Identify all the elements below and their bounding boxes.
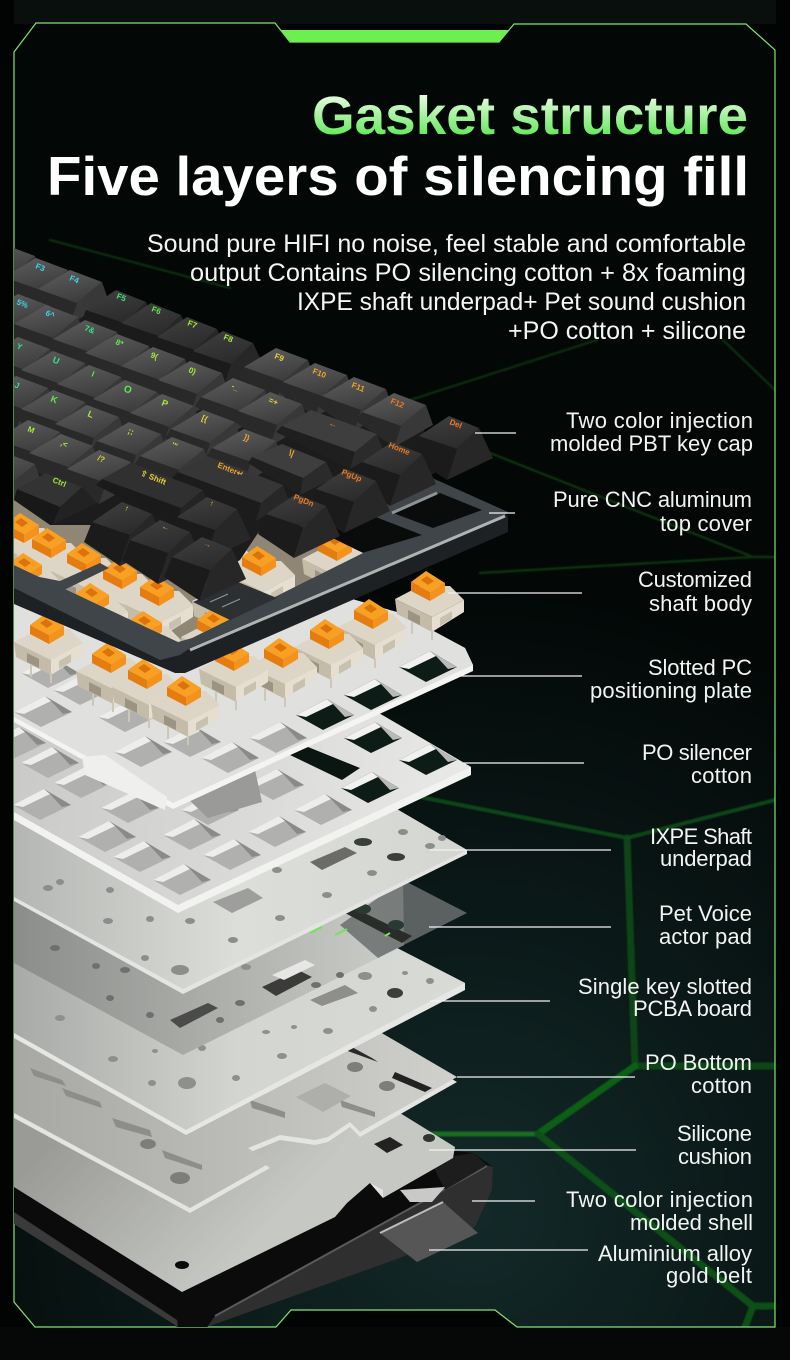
knob pad	[193, 582, 277, 620]
key legends: Home	[387, 441, 412, 457]
key: backslash	[248, 444, 334, 495]
key legends: =+	[267, 396, 280, 407]
key legends: I	[90, 370, 96, 379]
key legends: ↑	[208, 499, 215, 508]
key legends: ]}	[242, 433, 251, 443]
switches inside cover	[14, 513, 363, 642]
top background strip	[14, 0, 776, 24]
key legends: F5	[115, 292, 128, 304]
key legends: [{	[200, 414, 209, 424]
layer: silicone cushion	[14, 1114, 455, 1292]
callout: shaft body	[448, 567, 752, 616]
key legends: /?	[96, 454, 106, 465]
background green hexagon lines	[50, 240, 775, 1327]
key: shift	[96, 464, 204, 508]
callout: silicone: Silicone	[677, 1121, 752, 1146]
green top bar	[280, 30, 509, 42]
key legends: ⇧ Shift	[139, 469, 168, 487]
key legends: Del	[448, 418, 463, 431]
intro paragraph: output Contains PO silencing cotton + 8x foaming	[190, 259, 746, 287]
key legends: Ctrl	[51, 476, 67, 489]
intro paragraph: +PO cotton + silicone	[508, 317, 746, 345]
callout: silicone: cushion	[678, 1144, 752, 1169]
callout: shaft body: shaft body	[649, 591, 752, 616]
switch bay inside cover	[14, 500, 363, 642]
key: backspace	[276, 410, 383, 469]
exploded keyboard illustration	[0, 244, 508, 1327]
key legends: 7&	[83, 324, 96, 336]
intro paragraph: Sound pure HIFI no noise, feel stable and comfortable	[147, 230, 746, 258]
key legends: '"	[170, 441, 179, 451]
key legends: J	[13, 381, 21, 391]
key legends: O	[122, 384, 133, 397]
layer: PO bottom cotton	[14, 1033, 457, 1213]
title line 2: Five layers of silencing fill	[47, 145, 749, 207]
callout: key cap: Two color injection	[566, 408, 753, 433]
callout: PO silencer: PO silencer	[642, 740, 752, 765]
callout: PC plate: Slotted PC	[648, 655, 752, 680]
layer: pet voice actor pad	[14, 883, 467, 1055]
key legends: ,<	[59, 439, 69, 450]
callout: silicone	[429, 1121, 752, 1169]
callout: PO silencer: cotton	[691, 763, 752, 788]
belt highlight	[380, 1202, 443, 1233]
key legends: F12	[389, 397, 406, 410]
layer: single key slotted PCBA board	[14, 948, 465, 1135]
callout: PO bottom	[457, 1050, 752, 1098]
callout: PCBA: Single key slotted	[578, 974, 752, 999]
callout: shell: Two color injection	[566, 1187, 753, 1212]
key legends: PgDn	[292, 493, 315, 509]
key legends: -_	[230, 382, 241, 393]
callout: PO bottom: PO Bottom	[645, 1050, 752, 1075]
key legends: K	[49, 394, 59, 405]
callout: IXPE: underpad	[660, 846, 752, 871]
callout: key cap: molded PBT key cap	[550, 431, 753, 456]
intro paragraph: IXPE shaft underpad+ Pet sound cushion	[297, 288, 746, 316]
callout: shell	[472, 1187, 753, 1235]
callout: PCBA: PCBA board	[633, 996, 752, 1021]
key legends: F4	[68, 274, 81, 286]
key legends: 8*	[114, 338, 125, 349]
layer: slotted PC positioning plate	[14, 600, 473, 810]
cross bar	[38, 563, 109, 590]
tab on plate	[82, 755, 167, 810]
callout: top cover	[489, 487, 752, 536]
key legends: M	[26, 425, 36, 435]
callout: top cover: top cover	[660, 511, 752, 536]
key legends: F3	[34, 262, 47, 274]
callout: PC plate: positioning plate	[590, 678, 752, 703]
callout: PO silencer	[463, 740, 752, 788]
callout: shaft body: Customized	[638, 567, 752, 592]
key legends: PgUp	[340, 468, 363, 484]
key legends: ;:	[126, 426, 136, 437]
key block underlay	[14, 316, 436, 580]
key legends: U	[51, 355, 61, 366]
key legends: 0)	[187, 366, 198, 377]
key legends: ←	[160, 522, 171, 533]
layer: aluminium alloy gold belt	[380, 1202, 478, 1262]
key legends: F11	[350, 381, 367, 394]
key legends: 5%	[15, 298, 29, 310]
callout: PC plate	[456, 655, 752, 703]
callout: shell: molded shell	[630, 1210, 753, 1235]
layer: two color injection shell	[14, 1151, 493, 1327]
callout: belt: Aluminium alloy	[598, 1241, 752, 1266]
layer: PO silencer cotton	[14, 714, 471, 913]
callout: key cap	[475, 408, 753, 456]
key legends: F10	[311, 367, 328, 380]
key legends: 9(	[149, 351, 160, 362]
key legends: F8	[222, 333, 235, 345]
key legends: Enter↵	[216, 461, 245, 479]
key legends: F7	[186, 319, 199, 331]
key legends: 6^	[44, 309, 56, 320]
key: enter	[172, 456, 289, 521]
callout: top cover: Pure CNC aluminum	[553, 487, 752, 512]
key legends: →	[202, 539, 213, 550]
key legends: F6	[150, 305, 163, 317]
callout: Pet: actor pad	[659, 924, 752, 949]
keycaps	[0, 244, 493, 601]
callout: IXPE	[430, 824, 752, 871]
callout: PCBA	[430, 974, 752, 1021]
bottom background strip	[0, 1327, 790, 1360]
callout: Pet: Pet Voice	[659, 901, 752, 926]
key legends: ↑	[123, 504, 130, 513]
intro paragraph	[147, 230, 746, 345]
key legends: P	[160, 398, 170, 409]
layer: IXPE shaft underpad	[14, 810, 467, 994]
layer: CNC aluminum top cover	[14, 478, 508, 673]
callout: PO bottom: cotton	[691, 1073, 752, 1098]
title line 1: Gasket structure	[312, 86, 748, 146]
callout: IXPE: IXPE Shaft	[650, 824, 752, 849]
key legends: \|	[287, 448, 296, 459]
key legends: F9	[273, 352, 286, 364]
callout: belt: gold belt	[666, 1263, 752, 1288]
key legends: ←	[327, 418, 339, 430]
key: ctrl	[14, 474, 82, 507]
key legends: L	[86, 409, 96, 420]
switches below the top cover	[14, 571, 464, 745]
heading	[47, 86, 749, 207]
callout: belt	[429, 1241, 752, 1288]
callout: Pet	[429, 901, 752, 949]
key legends: Y	[15, 342, 24, 352]
key legends	[13, 262, 463, 550]
